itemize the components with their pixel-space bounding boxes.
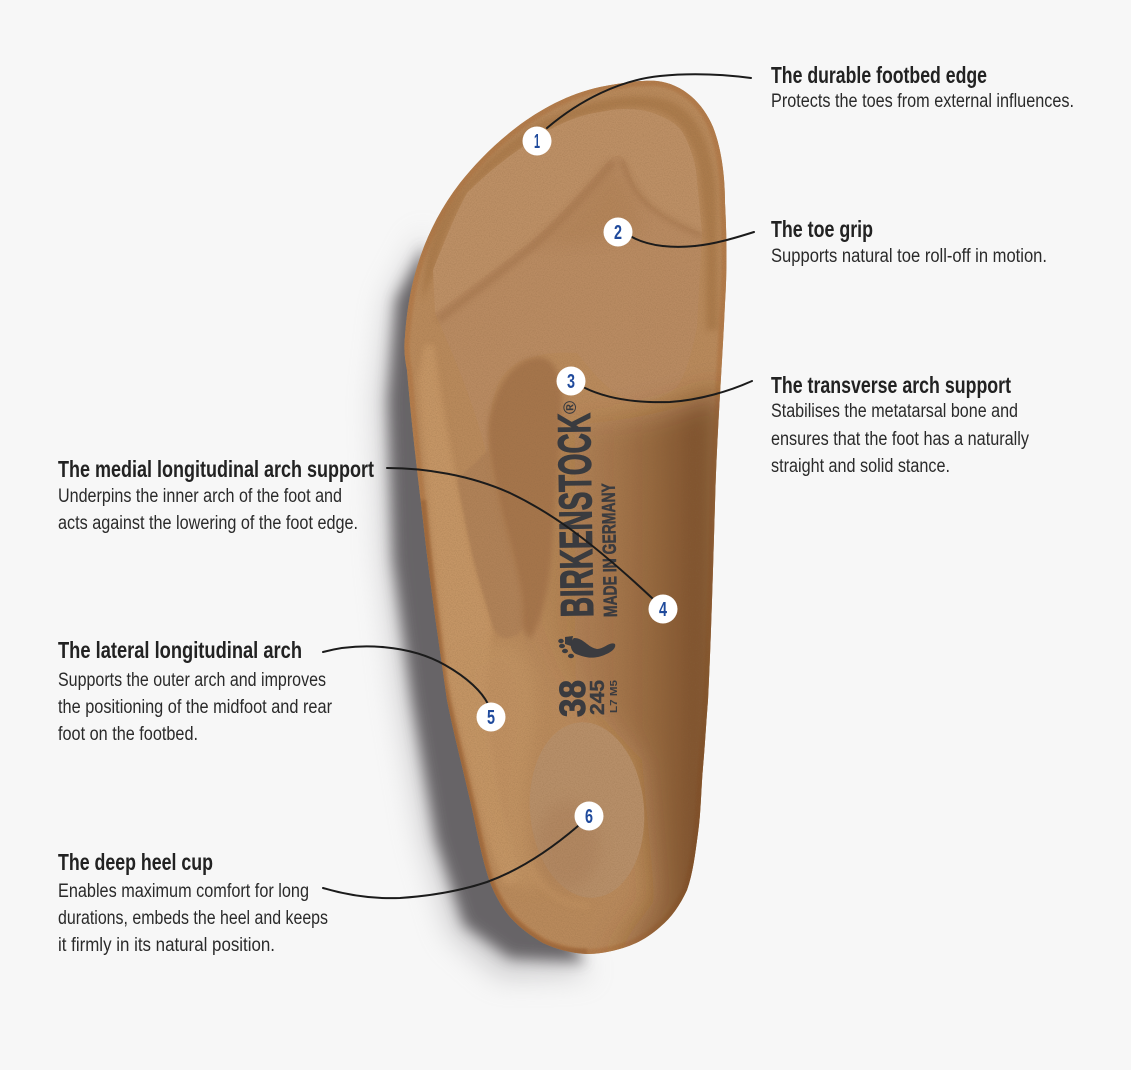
icon: foot print bbox=[558, 636, 615, 658]
size 38: 38 bbox=[552, 680, 593, 717]
badge 3: 3 bbox=[567, 371, 575, 393]
callout text: transverse arch support: Stabilises the metatarsal bone and bbox=[771, 401, 1018, 422]
badge 5: 5 bbox=[487, 707, 495, 729]
lower left rim dark edge bbox=[423, 500, 587, 952]
callout text: deep heel cup: Enables maximum comfort for long bbox=[58, 881, 309, 902]
callout line 6 bbox=[323, 826, 578, 898]
toe plateau bbox=[433, 109, 702, 313]
medial arch support pad bbox=[488, 357, 562, 640]
heel cup floor bbox=[530, 722, 644, 898]
lateral midfoot light area bbox=[494, 656, 496, 658]
callout text: durable footbed edge: The durable footbed edge bbox=[771, 62, 987, 88]
size 245: 245 bbox=[587, 680, 609, 715]
callout text: toe grip: Supports natural toe roll-off in motion. bbox=[771, 246, 1047, 267]
footbed imprint bbox=[548, 401, 622, 717]
callout text: deep heel cup: The deep heel cup bbox=[58, 849, 213, 875]
callout text: transverse arch support bbox=[771, 372, 1029, 477]
registered mark: ® bbox=[560, 401, 580, 414]
callout text: lateral longitudinal arch: Supports the outer arch and improves bbox=[58, 670, 326, 691]
badge 6: 6 bbox=[585, 806, 593, 828]
callout text: lateral longitudinal arch bbox=[58, 637, 333, 745]
width code: L7 M5 bbox=[609, 679, 620, 713]
callout text: durable footbed edge: Protects the toes from external influences. bbox=[771, 91, 1074, 112]
callout text: medial longitudinal arch support: acts against the lowering of the foot edge. bbox=[58, 513, 358, 534]
badge 4: 4 bbox=[659, 599, 668, 621]
callout line 2 bbox=[632, 232, 754, 247]
badge 5 bbox=[476, 702, 506, 732]
medial arch light lobe bbox=[458, 456, 519, 636]
callout text: transverse arch support: The transverse arch support bbox=[771, 372, 1011, 398]
badge 4 bbox=[648, 594, 678, 624]
callout text: transverse arch support: straight and solid stance. bbox=[771, 456, 950, 477]
toe rim shading bbox=[422, 96, 718, 330]
callout text: transverse arch support: ensures that the foot has a naturally bbox=[771, 429, 1029, 450]
callout text: deep heel cup: it firmly in its natural position. bbox=[58, 935, 275, 956]
made in germany: MADE IN GERMANY bbox=[599, 483, 622, 617]
callout text: durable footbed edge bbox=[771, 62, 1074, 112]
callout text: toe grip: The toe grip bbox=[771, 216, 873, 242]
badge 2 bbox=[604, 218, 632, 246]
insole footbed bbox=[404, 80, 726, 954]
heel cup rim highlight bbox=[528, 862, 590, 906]
callout text: lateral longitudinal arch: foot on the footbed. bbox=[58, 724, 198, 745]
callout text: lateral longitudinal arch: the positioning of the midfoot and rear bbox=[58, 697, 333, 718]
forefoot ball area bbox=[435, 155, 702, 470]
badge 1 bbox=[522, 126, 552, 156]
callout text: deep heel cup bbox=[58, 849, 328, 956]
midfoot dark hollow bbox=[558, 383, 720, 949]
brand wordmark: BIRKENSTOCK bbox=[548, 413, 603, 618]
callout text: medial longitudinal arch support bbox=[58, 456, 374, 534]
callout line 1 bbox=[547, 74, 751, 128]
heel cup lower shading bbox=[536, 801, 600, 889]
left wall highlight bbox=[420, 346, 492, 819]
callout text: lateral longitudinal arch: The lateral longitudinal arch bbox=[58, 637, 302, 663]
badge 1: 1 bbox=[534, 131, 540, 153]
cork grain bbox=[406, 81, 726, 954]
badge 2: 2 bbox=[614, 222, 622, 244]
callout text: medial longitudinal arch support: The medial longitudinal arch support bbox=[58, 456, 374, 482]
badge 3 bbox=[556, 366, 586, 396]
callout line 3 bbox=[585, 381, 752, 402]
callout text: medial longitudinal arch support: Underpins the inner arch of the foot and bbox=[58, 486, 342, 507]
badge 6 bbox=[574, 802, 604, 830]
callout text: deep heel cup: durations, embeds the heel and keeps bbox=[58, 908, 328, 929]
callout line 5 bbox=[323, 646, 488, 704]
cork base bbox=[404, 80, 726, 954]
outer rim edge bbox=[404, 81, 726, 954]
toe ridge shading bbox=[438, 162, 613, 320]
drop shadow of footbed bbox=[376, 230, 590, 978]
callout text: toe grip bbox=[771, 216, 1047, 267]
callout line 4 bbox=[387, 468, 652, 598]
